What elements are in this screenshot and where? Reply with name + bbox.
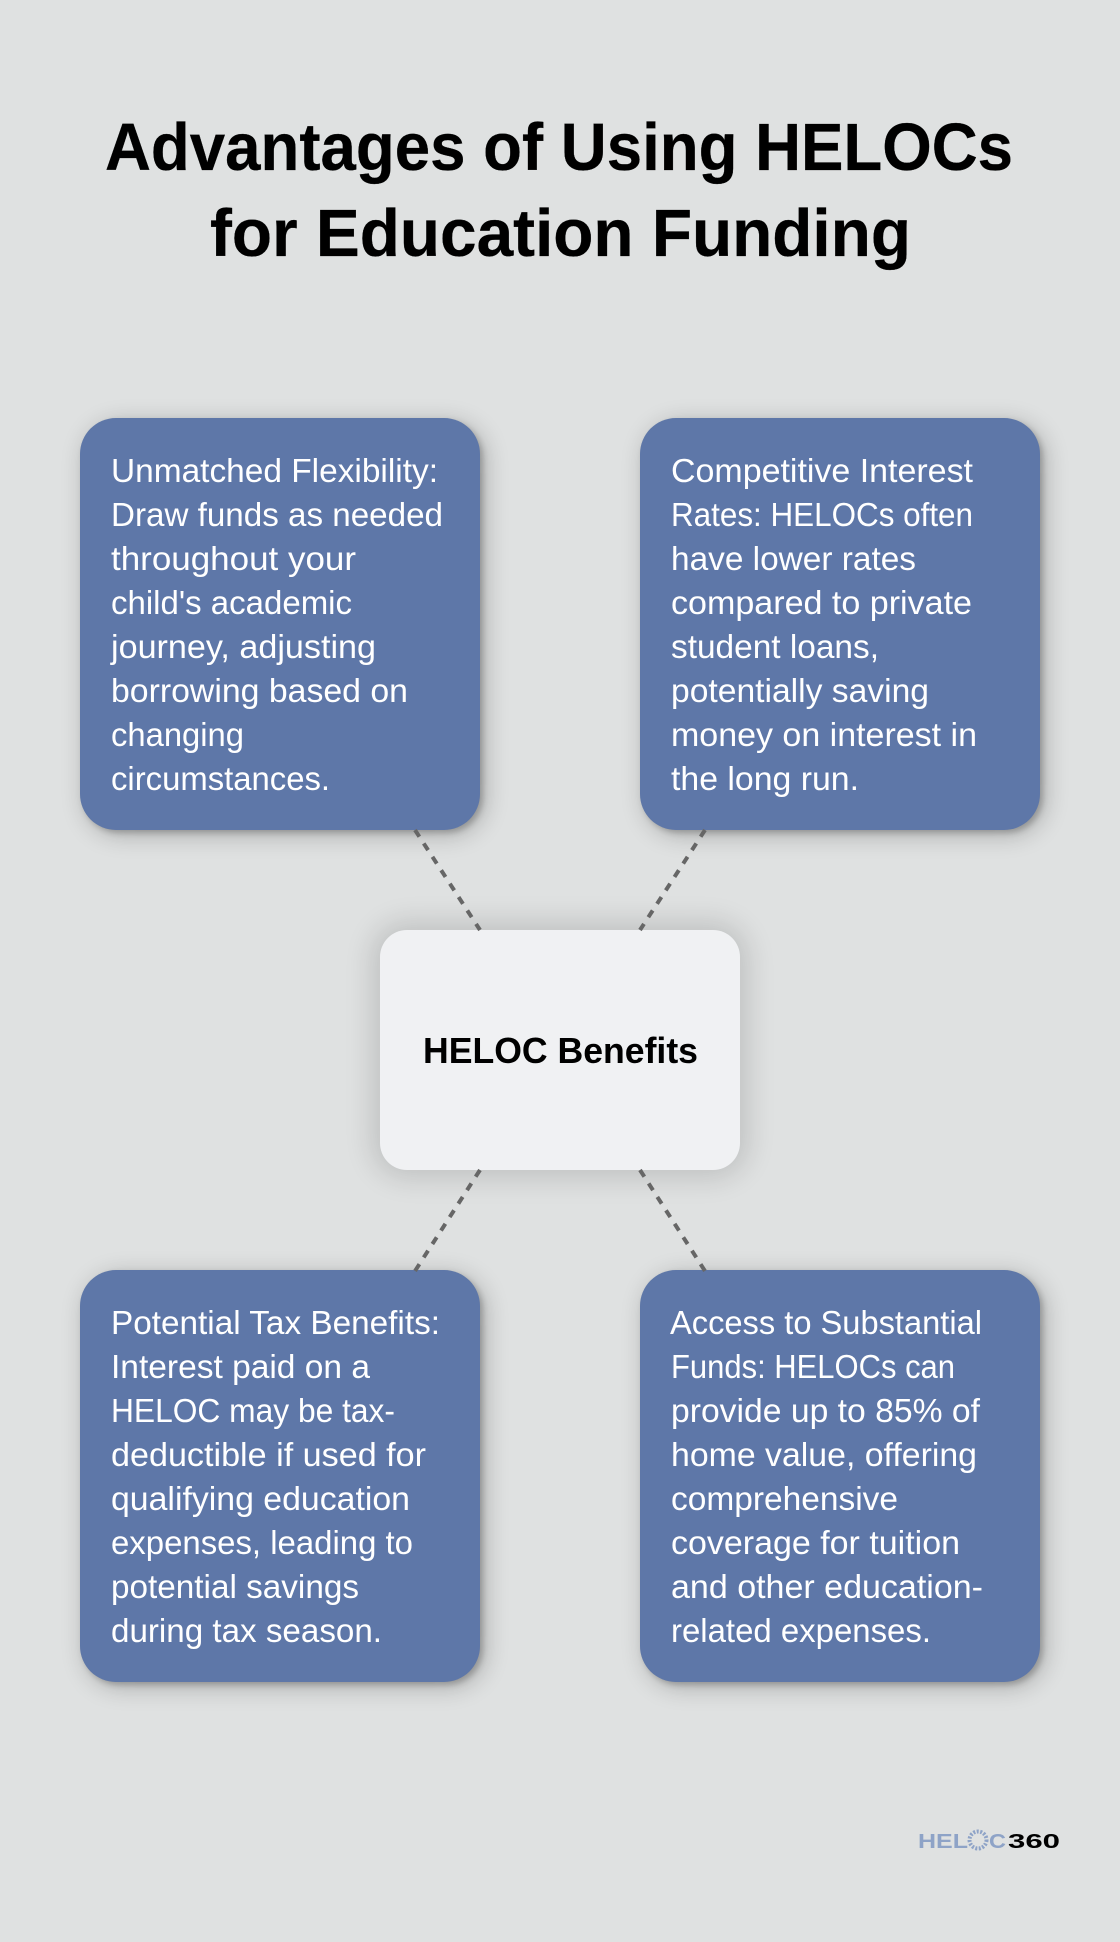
text: access to substantial funds: provide up to 85% of [671, 1392, 981, 1429]
text: competitive interest rates: have lower rates [671, 540, 916, 577]
text: access to substantial funds: comprehensive [671, 1480, 898, 1517]
text: potential tax benefits [111, 1304, 440, 1649]
text: unmatched flexibility: circumstances. [111, 760, 330, 797]
text: competitive interest rates: potentially saving [671, 672, 929, 709]
text: access to substantial funds: home value, offering [671, 1436, 977, 1473]
text: access to substantial funds: and other education- [671, 1568, 983, 1605]
text: potential tax benefits: Interest paid on a [111, 1348, 371, 1385]
text: potential tax benefits: Potential Tax Benefits: [111, 1304, 440, 1341]
text: access to substantial funds: coverage for tuition [671, 1524, 960, 1561]
text: unmatched flexibility: changing [111, 716, 244, 753]
logo: HELOC360: HEL [918, 1831, 968, 1853]
panel: unmatched flexibility [80, 418, 480, 830]
text: potential tax benefits: deductible if used for [111, 1436, 426, 1473]
text: unmatched flexibility: Unmatched Flexibility: [111, 452, 438, 489]
logo: HELOC360: C [989, 1831, 1006, 1853]
text: access to substantial funds [670, 1304, 983, 1649]
text: potential tax benefits: potential savings [111, 1568, 359, 1605]
text: competitive interest rates: compared to private [671, 584, 972, 621]
text: unmatched flexibility: child's academic [111, 584, 352, 621]
text: unmatched flexibility [110, 452, 443, 797]
panel: potential tax benefits [80, 1270, 480, 1682]
logo: HELOC360: 360 [1008, 1831, 1060, 1853]
logo: HELOC360 [918, 1831, 1060, 1853]
text: competitive interest rates: student loans, [671, 628, 879, 665]
text: competitive interest rates: the long run. [671, 760, 859, 797]
text: potential tax benefits: qualifying education [111, 1480, 410, 1517]
text: competitive interest rates: Competitive Interest [671, 452, 973, 489]
text: access to substantial funds: Funds: HELOCs can [671, 1348, 955, 1385]
text: unmatched flexibility: journey, adjusting [110, 628, 376, 665]
text: potential tax benefits: during tax season. [111, 1612, 382, 1649]
text: competitive interest rates [671, 452, 977, 797]
panel: competitive interest rates [640, 418, 1040, 830]
panel: center HELOC benefits [380, 930, 740, 1170]
title [105, 110, 1013, 271]
text: competitive interest rates: money on interest in [671, 716, 977, 753]
text: potential tax benefits: expenses, leading to [111, 1524, 413, 1561]
title: Advantages of Using HELOCs [105, 110, 1013, 185]
text: access to substantial funds: Access to Substantial [670, 1304, 982, 1341]
text: potential tax benefits: HELOC may be tax- [111, 1392, 395, 1429]
text: unmatched flexibility: throughout your [111, 540, 356, 577]
text: unmatched flexibility: Draw funds as needed [111, 496, 443, 533]
title: for Education Funding [210, 196, 911, 271]
text: unmatched flexibility: borrowing based on [111, 672, 408, 709]
text: competitive interest rates: Rates: HELOCs often [671, 496, 973, 533]
text: access to substantial funds: related expenses. [671, 1612, 931, 1649]
center label: HELOC Benefits [423, 1030, 698, 1071]
panel: access to substantial funds [640, 1270, 1040, 1682]
